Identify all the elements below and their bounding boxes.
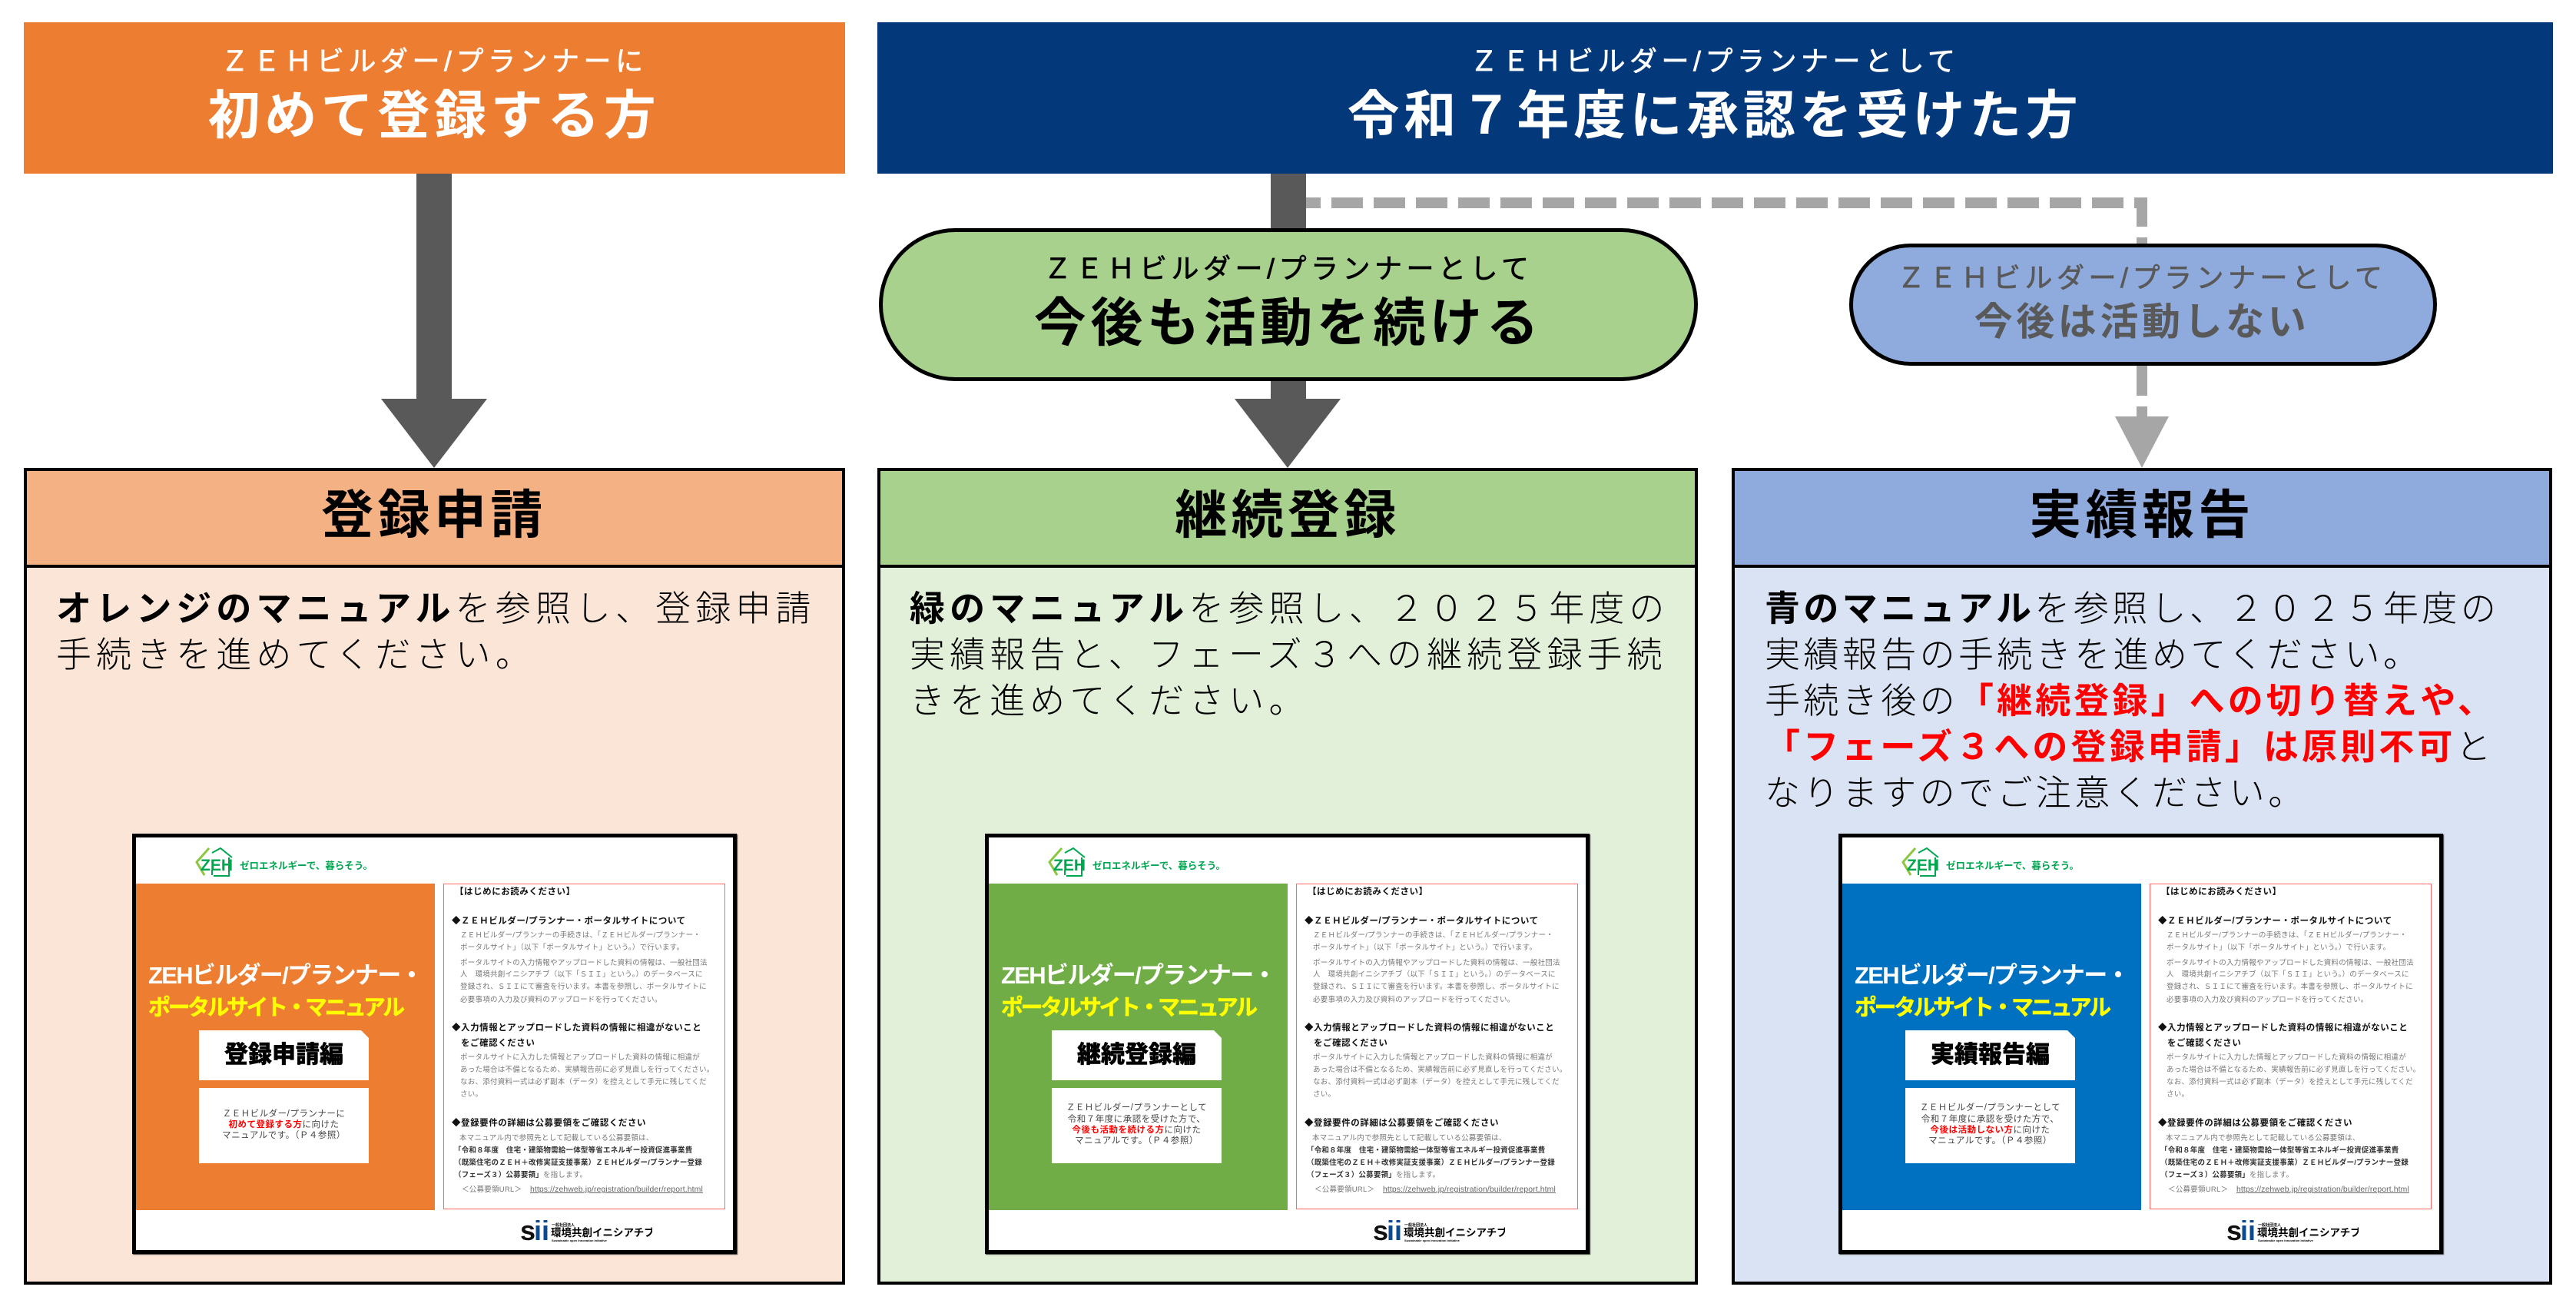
pill subtitle: ＺＥＨビルダー/プランナーとして [1898, 262, 2386, 294]
notice text: ポータルサイトに入力した情報とアップロードした資料の情報に相違が [2167, 1053, 2406, 1062]
notice text: 登録され、ＳＩＩにて審査を行います。本書を参照し、ポータルサイトに [460, 983, 707, 991]
volume label [1905, 1030, 2075, 1080]
logo: SII: 一般社団法人 [552, 1222, 575, 1228]
notice text: ポータルサイトに入力した情報とアップロードした資料の情報に相違が [1313, 1053, 1553, 1062]
notice text: ＺＥＨビルダー/プランナーの手続きは、「ＺＥＨビルダー/プランナー・ [1313, 931, 1553, 940]
panel text: なりますのでご注意ください。 [1765, 765, 2307, 816]
header title: 令和７年度に承認を受けた方 [1348, 87, 2082, 145]
logo: ZEH [1901, 847, 2079, 877]
notice heading: 【はじめにお読みください】 [1308, 887, 1428, 897]
logo: ZEH: ZEH [201, 857, 233, 874]
audience note: 令和７年度に承認を受けた方で、 [1068, 1115, 1205, 1124]
logo: ZEH: ゼロエネルギーで、暮らそう。 [240, 857, 373, 872]
panel heading: 登録申請 [321, 486, 547, 545]
notice text [2158, 916, 2420, 1194]
notice text: あった場合は不備となるため、実績報告前に必ず見直しを行ってください。 [1313, 1066, 1566, 1074]
panel text: オレンジのマニュアルを参照し、登録申請 [56, 581, 816, 632]
volume label [1052, 1030, 1222, 1080]
notice text: （既築住宅のＺＥＨ＋改修実証支援事業）ＺＥＨビルダー/プランナー登録 [1307, 1159, 1555, 1167]
notice text: （既築住宅のＺＥＨ＋改修実証支援事業）ＺＥＨビルダー/プランナー登録 [454, 1159, 702, 1167]
notice text [452, 916, 714, 1194]
logo: SII: Sustainable open Innovation Initiative [1404, 1239, 1460, 1242]
notice text: ＜公募要領URL＞ [462, 1186, 522, 1194]
logo: ZEH: ゼロエネルギーで、暮らそう。 [1946, 857, 2079, 872]
notice text: https://zehweb.jp/registration/builder/report.html [530, 1186, 703, 1194]
notice text: ◆入力情報とアップロードした資料の情報に相違がないこと [452, 1023, 701, 1033]
notice text: ◆ＺＥＨビルダー/プランナー・ポータルサイトについて [1305, 917, 1539, 926]
manual border [132, 834, 737, 1254]
notice text: ◆登録要件の詳細は公募要領をご確認ください [2158, 1119, 2352, 1128]
notice text: ポータルサイト」（以下「ポータルサイト」という。）で行います。 [1313, 944, 1537, 952]
notice text: 必要事項の入力及び資料のアップロードを行ってください。 [2167, 996, 2368, 1004]
pill title: 今後も活動を続ける [1034, 294, 1543, 353]
logo: SII [1373, 1220, 1505, 1243]
cover title: ZEHビルダー/プランナー・ [148, 962, 423, 989]
notice text: ＺＥＨビルダー/プランナーの手続きは、「ＺＥＨビルダー/プランナー・ [2167, 931, 2407, 940]
cover subtitle: ポータルサイト・マニュアル [1001, 996, 1255, 1020]
notice text: なお、添付資料一式は必ず副本（データ）を控えとして手元に残してくだ [1313, 1078, 1560, 1086]
notice text: 「令和８年度 住宅・建築物需給一体型等省エネルギー投資促進事業費 [2160, 1146, 2399, 1155]
notice text: 本マニュアル内で参照先として記載している公募要領は、 [459, 1134, 654, 1143]
manual cover: green renewal [985, 834, 1590, 1254]
panel text [56, 581, 816, 678]
panel text: 実績報告と、フェーズ３への継続登録手続 [910, 627, 1667, 678]
notice text: 登録され、ＳＩＩにて審査を行います。本書を参照し、ポータルサイトに [2167, 983, 2413, 991]
arrow: orange column down to registration [381, 174, 487, 468]
notice text: ポータルサイトの入力情報やアップロードした資料の情報は、一般社団法 [460, 959, 708, 967]
logo: SII: 環境共創イニシアチブ [551, 1224, 652, 1239]
logo: SII [520, 1220, 652, 1243]
notice text [1305, 916, 1566, 1194]
notice text: なお、添付資料一式は必ず副本（データ）を控えとして手元に残してくだ [460, 1078, 707, 1086]
cover title: ZEHビルダー/プランナー・ [1001, 962, 1275, 989]
volume label: 実績報告編 [1931, 1041, 2050, 1068]
audience note: ＺＥＨビルダー/プランナーに [223, 1109, 345, 1119]
notice text: ◆入力情報とアップロードした資料の情報に相違がないこと [1305, 1023, 1554, 1033]
notice text: 「令和８年度 住宅・建築物需給一体型等省エネルギー投資促進事業費 [1307, 1146, 1545, 1155]
notice text: ＜公募要領URL＞ [1315, 1186, 1374, 1194]
manual cover: blue results report [1838, 834, 2443, 1254]
cover subtitle: ポータルサイト・マニュアル [148, 996, 403, 1020]
pill title: 今後は活動しない [1974, 300, 2309, 343]
notice text: 人 環境共創イニシアチブ（以下「ＳＩＩ」という。）のデータベースに [2167, 970, 2409, 979]
audience note [1052, 1088, 1222, 1163]
panel: registration application [24, 468, 845, 1285]
panel: results report [1732, 468, 2552, 1285]
logo: ZEH [195, 847, 373, 877]
logo: SII: 一般社団法人 [1404, 1222, 1427, 1228]
arrow: continue activity down to renewal [1235, 174, 1341, 468]
notice heading: 【はじめにお読みください】 [2161, 887, 2282, 897]
logo: SII: 環境共創イニシアチブ [1404, 1224, 1505, 1239]
notice heading: 【はじめにお読みください】 [455, 887, 575, 897]
notice text: https://zehweb.jp/registration/builder/report.html [2236, 1186, 2409, 1194]
notice text: さい。 [2167, 1090, 2189, 1099]
logo: ZEH: ZEH [1053, 857, 1086, 874]
notice frame [1296, 884, 1578, 1209]
notice text: ＺＥＨビルダー/プランナーの手続きは、「ＺＥＨビルダー/プランナー・ [460, 931, 701, 940]
logo: SII: Sustainable open Innovation Initiative [2258, 1239, 2314, 1242]
notice text: さい。 [460, 1090, 482, 1099]
manual cover: orange registration [132, 834, 737, 1254]
audience note: マニュアルです。（Ｐ４参照） [1928, 1136, 2052, 1146]
notice text: さい。 [1313, 1090, 1335, 1099]
notice text: をご確認ください [461, 1039, 535, 1048]
header: first-time registrants [24, 22, 845, 174]
audience note: 今後は活動しない方に向けた [1930, 1126, 2050, 1135]
panel text: 実績報告の手続きを進めてください。 [1765, 627, 2422, 678]
audience note: 令和７年度に承認を受けた方で、 [1921, 1115, 2059, 1124]
arrow: dashed path to results report [1306, 203, 2169, 468]
manual border [985, 834, 1590, 1254]
header subtitle: ＺＥＨビルダー/プランナーに [220, 45, 648, 77]
panel: renewal registration [877, 468, 1698, 1285]
panel heading [1735, 471, 2549, 568]
notice text: あった場合は不備となるため、実績報告前に必ず見直しを行ってください。 [2167, 1066, 2420, 1074]
audience note [199, 1088, 369, 1163]
panel text: きを進めてください。 [910, 673, 1309, 724]
panel text [910, 581, 1669, 724]
cover title: ZEHビルダー/プランナー・ [1855, 962, 2129, 989]
notice text: 人 環境共創イニシアチブ（以下「ＳＩＩ」という。）のデータベースに [1313, 970, 1556, 979]
audience note: 今後も活動を続ける方に向けた [1073, 1126, 1202, 1135]
header subtitle: ＺＥＨビルダー/プランナーとして [1470, 45, 1959, 77]
notice frame [2150, 884, 2432, 1209]
audience note: ＺＥＨビルダー/プランナーとして [1066, 1103, 1207, 1113]
notice text: ポータルサイトの入力情報やアップロードした資料の情報は、一般社団法 [1313, 959, 1560, 967]
notice text: https://zehweb.jp/registration/builder/report.html [1383, 1186, 1556, 1194]
panel heading [27, 471, 842, 568]
panel text: 手続きを進めてください。 [56, 627, 535, 678]
logo: SII: 環境共創イニシアチブ [2257, 1224, 2359, 1239]
notice text: をご確認ください [1314, 1039, 1387, 1048]
volume label [199, 1030, 369, 1080]
header: approved in Reiwa 7 [877, 22, 2553, 174]
panel text [1765, 581, 2499, 816]
cover block [989, 884, 1288, 1210]
notice text: ＜公募要領URL＞ [2168, 1186, 2228, 1194]
cover block [1842, 884, 2141, 1210]
notice text: 「令和８年度 住宅・建築物需給一体型等省エネルギー投資促進事業費 [454, 1146, 692, 1155]
notice text: なお、添付資料一式は必ず副本（データ）を控えとして手元に残してくだ [2167, 1078, 2413, 1086]
notice text: （既築住宅のＺＥＨ＋改修実証支援事業）ＺＥＨビルダー/プランナー登録 [2160, 1159, 2409, 1167]
panel text: 緑のマニュアルを参照し、２０２５年度の [910, 581, 1669, 632]
audience note: マニュアルです。（Ｐ４参照） [1075, 1136, 1198, 1146]
notice text: 本マニュアル内で参照先として記載している公募要領は、 [2166, 1134, 2360, 1143]
audience note: 初めて登録する方に向けた [229, 1120, 340, 1129]
notice text: （フェーズ３）公募要領」を指します。 [1307, 1171, 1440, 1179]
logo: SII: 一般社団法人 [2258, 1222, 2281, 1228]
panel heading: 継続登録 [1175, 486, 1401, 545]
notice text: （フェーズ３）公募要領」を指します。 [2160, 1171, 2293, 1179]
notice text: ポータルサイトに入力した情報とアップロードした資料の情報に相違が [460, 1053, 700, 1062]
notice text: ポータルサイト」（以下「ポータルサイト」という。）で行います。 [2167, 944, 2390, 952]
logo: ZEH: ZEH [1907, 857, 1939, 874]
notice text: ◆登録要件の詳細は公募要領をご確認ください [452, 1119, 646, 1128]
audience note: マニュアルです。（Ｐ４参照） [222, 1131, 346, 1140]
panel text: 手続き後の「継続登録」への切り替えや、 [1765, 673, 2496, 724]
audience note: ＺＥＨビルダー/プランナーとして [1920, 1103, 2060, 1113]
notice text: 登録され、ＳＩＩにて審査を行います。本書を参照し、ポータルサイトに [1313, 983, 1560, 991]
panel heading [880, 471, 1695, 568]
notice text: 必要事項の入力及び資料のアップロードを行ってください。 [460, 996, 662, 1004]
notice text: （フェーズ３）公募要領」を指します。 [454, 1171, 587, 1179]
notice text: 必要事項の入力及び資料のアップロードを行ってください。 [1313, 996, 1515, 1004]
notice text: あった場合は不備となるため、実績報告前に必ず見直しを行ってください。 [460, 1066, 714, 1074]
panel text: 青のマニュアルを参照し、２０２５年度の [1765, 581, 2499, 632]
volume label: 登録申請編 [224, 1041, 343, 1068]
notice text: ◆登録要件の詳細は公募要領をご確認ください [1305, 1119, 1499, 1128]
manual border [1838, 834, 2443, 1254]
audience note [1905, 1088, 2075, 1163]
notice text: ポータルサイトの入力情報やアップロードした資料の情報は、一般社団法 [2167, 959, 2414, 967]
cover subtitle: ポータルサイト・マニュアル [1855, 996, 2109, 1020]
logo: ZEH [1048, 847, 1225, 877]
panel heading: 実績報告 [2029, 486, 2255, 545]
logo: ZEH: ゼロエネルギーで、暮らそう。 [1092, 857, 1225, 872]
logo: SII: Sustainable open Innovation Initiative [552, 1239, 608, 1242]
notice text: ◆ＺＥＨビルダー/プランナー・ポータルサイトについて [2158, 917, 2392, 926]
notice text: ◆ＺＥＨビルダー/プランナー・ポータルサイトについて [452, 917, 686, 926]
volume label: 継続登録編 [1077, 1041, 1196, 1068]
notice text: ポータルサイト」（以下「ポータルサイト」という。）で行います。 [460, 944, 684, 952]
notice text: 本マニュアル内で参照先として記載している公募要領は、 [1312, 1134, 1507, 1143]
decision pill: continue activity [879, 228, 1698, 381]
header title: 初めて登録する方 [208, 87, 660, 145]
pill subtitle: ＺＥＨビルダー/プランナーとして [1044, 253, 1533, 284]
notice text: をご確認ください [2167, 1039, 2241, 1048]
notice text: ◆入力情報とアップロードした資料の情報に相違がないこと [2158, 1023, 2408, 1033]
cover block [136, 884, 435, 1210]
logo: SII [2226, 1220, 2359, 1243]
panel text: 「フェーズ３への登録申請」は原則不可と [1765, 719, 2495, 770]
decision pill: no further activity [1849, 244, 2437, 366]
notice text: 人 環境共創イニシアチブ（以下「ＳＩＩ」という。）のデータベースに [460, 970, 703, 979]
notice frame [443, 884, 725, 1209]
